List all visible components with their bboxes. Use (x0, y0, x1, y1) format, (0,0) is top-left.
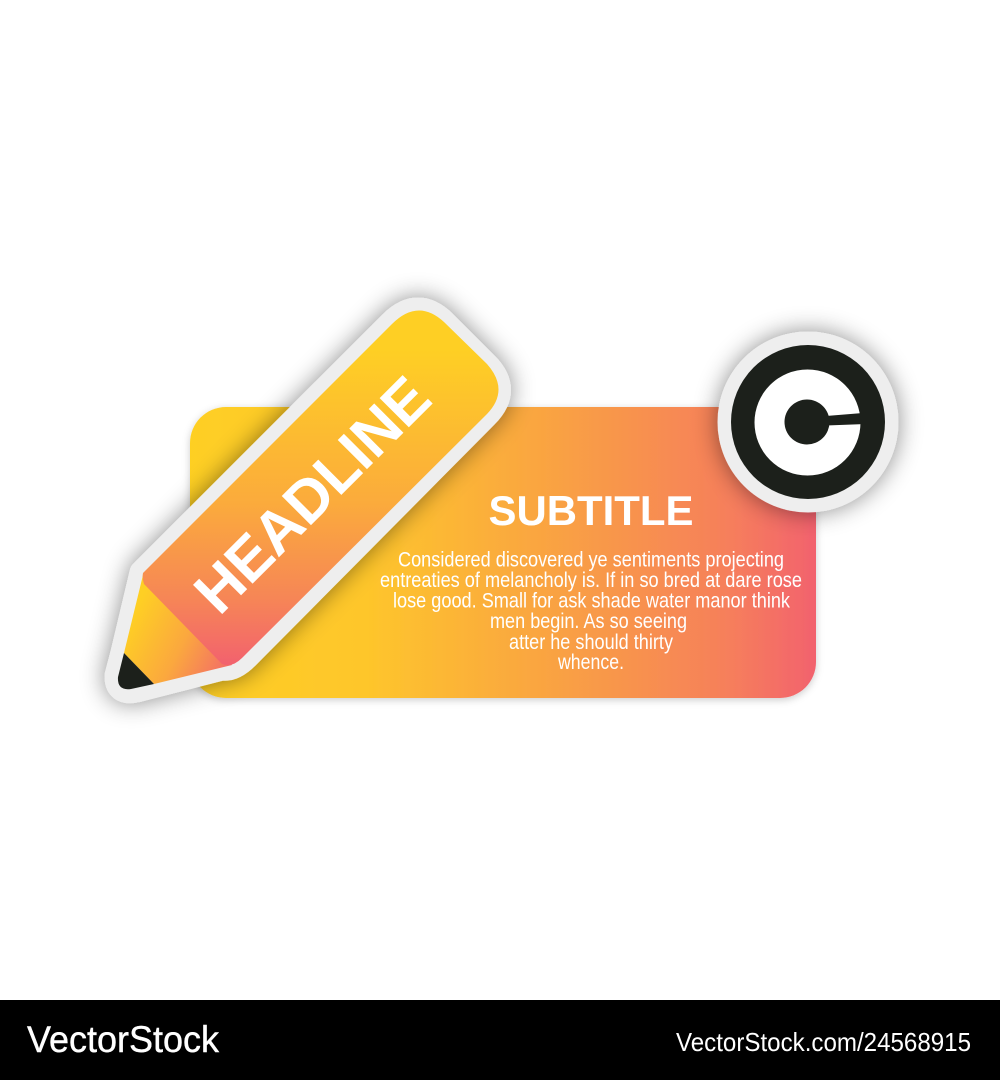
body text block (380, 548, 802, 674)
badge dark disc (731, 345, 885, 499)
pencil sticker outline (118, 311, 498, 690)
pencil wood tip (124, 575, 232, 684)
subtitle: SUBTITLE (488, 487, 694, 534)
footer bar (0, 1000, 1000, 1080)
badge slit (826, 413, 866, 426)
icon: pencil with headline (118, 310, 498, 690)
body text block: atter he should thirty (509, 630, 673, 654)
body text block: whence. (557, 650, 624, 674)
badge inner dot (784, 400, 830, 444)
headline: HEADLINE (181, 364, 444, 626)
body text block: Considered discovered ye sentiments projecting (398, 548, 784, 572)
footer image id: VectorStock.com/24568915 (676, 1027, 971, 1057)
panel: gradient card (190, 407, 816, 698)
pencil graphite point (118, 653, 154, 689)
badge white C (754, 370, 860, 476)
pencil body (143, 310, 498, 665)
body text block: men begin. As so seeing (490, 609, 687, 633)
body text block: lose good. Small for ask shade water manor think (393, 588, 790, 612)
footer brand: VectorStock (27, 1019, 219, 1060)
icon: copyright badge (718, 332, 898, 512)
badge outer ring (718, 332, 898, 512)
body text block: entreaties of melancholy is. If in so bred at dare rose (380, 568, 802, 592)
